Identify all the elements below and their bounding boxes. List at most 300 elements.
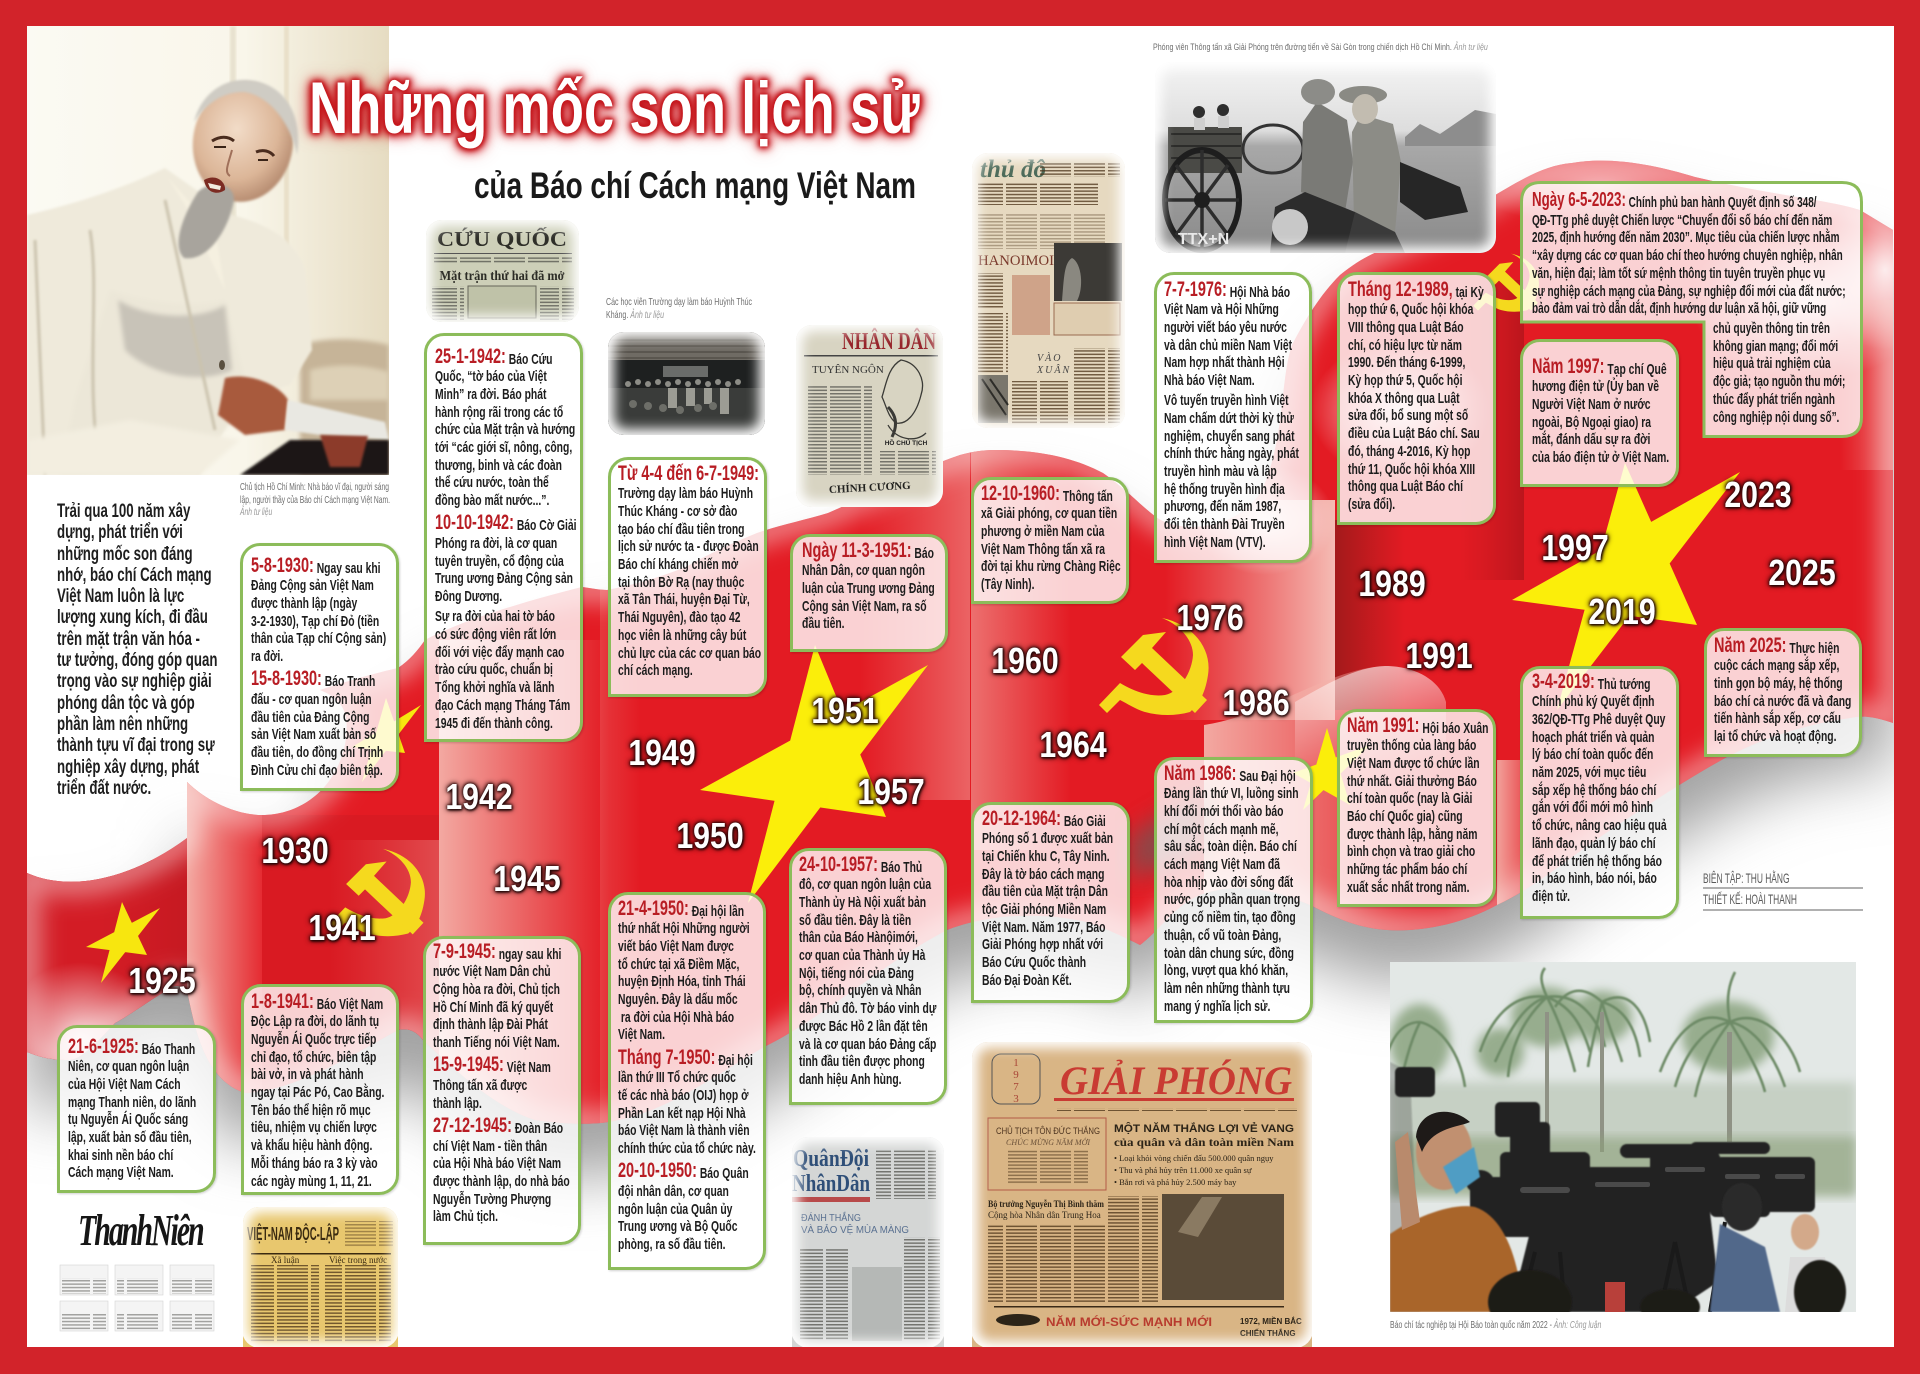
card: 1925: 21-6-1925: Báo Thanh bbox=[68, 1034, 195, 1058]
photo: Giai Phong newspaper: CHÚC MỪNG NĂM MỚI bbox=[1006, 1137, 1090, 1147]
title: Những mốc son lịch sử bbox=[309, 68, 920, 149]
card: 1976 bbox=[1154, 272, 1312, 563]
card: 1942: Quốc, “tờ báo của Việt bbox=[435, 368, 547, 385]
card: 1986: làm nên những thành tựu bbox=[1164, 980, 1290, 997]
card: 1949: Thúc Kháng - cơ sở đào bbox=[618, 503, 737, 520]
photo: Quan Doi Nhan Dan newspaper: NhânDân bbox=[792, 1171, 870, 1197]
card: 1949: học viên là những cây bút bbox=[618, 627, 746, 644]
star 1930 bbox=[352, 698, 421, 782]
card: 2023: không gian mạng; đổi mới bbox=[1713, 338, 1838, 355]
card: 2025: cuộc cách mạng sắp xếp, bbox=[1714, 657, 1839, 674]
card: 1945: nước Việt Nam Dân chủ bbox=[433, 963, 551, 980]
photo: Quan Doi Nhan Dan newspaper: ĐÁNH THẮNG bbox=[801, 1211, 861, 1224]
card: 1950: phòng, ra số đầu tiên. bbox=[618, 1236, 726, 1253]
card: 1957: đô, cơ quan ngôn luận của bbox=[799, 876, 931, 893]
card: 1964: Việt Nam. Năm 1977, Báo bbox=[982, 919, 1105, 936]
photo: war correspondents on motorbike: TTX+N bbox=[1178, 231, 1229, 248]
card: 1976: phương, đến năm 1987, bbox=[1164, 498, 1281, 515]
year 1957: 1957 bbox=[857, 771, 925, 812]
card: 2023: hiệu quả trải nghiệm của bbox=[1713, 355, 1831, 372]
card: 1950: thứ nhất Hội Những người bbox=[618, 920, 750, 937]
card: 1986: nước, góp phần quan trọng bbox=[1164, 891, 1300, 908]
card: 1976: 7-7-1976: Hội Nhà báo bbox=[1164, 278, 1290, 300]
big star 1951 bbox=[700, 645, 928, 903]
photo: Giai Phong newspaper: Bộ trưởng Nguyễn Thị Bình thăm bbox=[988, 1199, 1104, 1209]
card: 1942: Trung ương Đảng Cộng sản bbox=[435, 570, 573, 587]
card: 1986: cách mạng Việt Nam đã bbox=[1164, 856, 1280, 873]
card: 1925: Niên, cơ quan ngôn luận bbox=[68, 1058, 189, 1075]
year 2023: 2023 bbox=[1724, 474, 1792, 515]
photo: Giai Phong newspaper: CHIẾN THẮNG bbox=[1240, 1328, 1296, 1338]
card: 2023: “xây dựng các cơ quan báo chí theo hướng chuyên nghiệp, nhân bbox=[1532, 247, 1843, 264]
photo: Nhan Dan newspaper bbox=[796, 325, 943, 507]
card: 1950: 20-10-1950: Báo Quân bbox=[618, 1159, 749, 1182]
photo: Thu Do / Ha Noi Moi newspaper bbox=[972, 153, 1125, 428]
card: 1957 bbox=[789, 848, 947, 1105]
card: 1930 bbox=[240, 543, 399, 791]
card: 2025: lại tổ chức và hoạt động. bbox=[1714, 728, 1837, 745]
caption: school photo: Các học viên Trường dạy làm báo Huỳnh Thúc bbox=[606, 296, 752, 308]
photo: Cuu Quoc newspaper: CỨU QUỐC bbox=[437, 227, 567, 251]
year 1997: 1997 bbox=[1541, 527, 1609, 568]
card: 1976: Nam chấm dứt thời kỳ thử bbox=[1164, 410, 1294, 427]
card: 1997: mắt, đánh dấu sự ra đời bbox=[1532, 431, 1650, 448]
card: 1941: Tên báo thể hiện rõ mục bbox=[251, 1102, 371, 1119]
caption: portrait bbox=[240, 481, 390, 518]
card: 1942: Sự ra đời của hai tờ báo bbox=[435, 608, 555, 625]
card: 1941: Mỗi tháng báo ra 3 kỳ vào bbox=[251, 1155, 378, 1172]
intro text: trọng vào sự nghiệp giải bbox=[57, 670, 212, 692]
card: 1976: người viết báo yêu nước bbox=[1164, 319, 1287, 336]
card: 1989: (sửa đổi). bbox=[1348, 496, 1395, 513]
year 1986: 1986 bbox=[1222, 682, 1290, 723]
card: 1951: Nhân Dân, cơ quan ngôn bbox=[802, 562, 925, 579]
card: 1942: 1945 đi đến thành công. bbox=[435, 715, 553, 732]
card: 1957: 24-10-1957: Báo Thủ bbox=[799, 852, 922, 876]
photo: Giai Phong newspaper: Cộng hòa Nhân dân Trung Hoa bbox=[988, 1210, 1101, 1220]
card: 1976: chính thức hằng ngày, phát bbox=[1164, 445, 1299, 462]
card: 1950: Nguyên. Đây là dấu mốc bbox=[618, 991, 738, 1008]
caption: press corps: Báo chí tác nghiệp tại Hội Báo toàn quốc năm 2022 - Ảnh: Công luận bbox=[1390, 1320, 1601, 1331]
card: 1925: tụ Nguyễn Ái Quốc sáng bbox=[68, 1111, 188, 1128]
card: 1976: đổi tên thành Đài Truyền bbox=[1164, 516, 1285, 533]
star 1925 bbox=[86, 902, 160, 983]
card: 1941: Độc Lập ra đời, do lãnh tụ bbox=[251, 1013, 379, 1030]
caption: portrait: lập, người thầy của Báo chí Cách mạng Việt Nam. bbox=[240, 494, 390, 506]
intro text bbox=[57, 500, 217, 799]
card: 1976: hình Việt Nam (VTV). bbox=[1164, 534, 1266, 551]
card: 1986: hòa nhịp vào đời sống đất bbox=[1164, 874, 1293, 891]
card: 1925: mạng Thanh niên, do lãnh bbox=[68, 1094, 196, 1111]
card: 1942: thể cứu nước, toàn thể bbox=[435, 474, 549, 491]
card: 1950: Phần Lan kết nạp Hội Nhà bbox=[618, 1105, 746, 1122]
card: 1941: chỉ đạo, tổ chức, biên tập bbox=[251, 1049, 376, 1066]
card: 1942: tuyên truyền, cổ động của bbox=[435, 553, 564, 570]
card: 1991: xuất sắc nhất trong năm. bbox=[1347, 879, 1470, 896]
photo: Giai Phong newspaper: • Loại khỏi vòng chiến đấu 500.000 quân ngụy bbox=[1114, 1153, 1274, 1163]
year 1949: 1949 bbox=[628, 732, 696, 773]
card: 1945: 15-9-1945: Việt Nam bbox=[433, 1053, 551, 1076]
card: 1964: tộc Giải phóng Miền Nam bbox=[982, 901, 1106, 918]
card: 1964: Báo Cứu Quốc thành bbox=[982, 954, 1086, 971]
card: 1986: toàn dân chung sức, đồng bbox=[1164, 945, 1294, 962]
card: 1930: 5-8-1930: Ngay sau khi bbox=[251, 554, 381, 576]
intro text: Trải qua 100 năm xây bbox=[57, 500, 190, 522]
card: 1945: định thành lập Đài Phát bbox=[433, 1016, 548, 1033]
card: 1930: Đảng Cộng sản Việt Nam bbox=[251, 577, 374, 594]
card: 1989: 1990. Đến tháng 6-1999, bbox=[1348, 354, 1465, 371]
photo: Thu Do / Ha Noi Moi newspaper: HANOIMOI bbox=[978, 253, 1054, 269]
photo: Cuu Quoc newspaper: Mặt trận thứ hai đã mở bbox=[440, 269, 565, 284]
card: 1942: thương, binh và các đoàn bbox=[435, 457, 562, 474]
caption: school photo bbox=[606, 296, 752, 320]
card: 1930: đấu - cơ quan ngôn luận bbox=[251, 691, 372, 708]
card: 1942: 25-1-1942: Báo Cứu bbox=[435, 344, 552, 368]
card: 1950: lần thứ III Tổ chức quốc bbox=[618, 1069, 736, 1086]
card: 1986 bbox=[1154, 757, 1313, 1023]
logo: Thanh Nien handwriting: ThanhNiên bbox=[78, 1206, 203, 1255]
intro text: lượng xung kích, đi đầu bbox=[57, 606, 208, 628]
card: 1941: và khẩu hiệu hành động. bbox=[251, 1137, 372, 1154]
card: 1951: đầu tiên. bbox=[802, 615, 845, 632]
year 1960: 1960 bbox=[991, 640, 1059, 681]
photo: Giai Phong newspaper: 1 bbox=[1013, 1057, 1019, 1069]
photo: Giai Phong newspaper: MỘT NĂM THẮNG LỢI VẺ VANG bbox=[1114, 1122, 1294, 1135]
photo: Viet Nam Doc Lap newspaper: Việc trong nước bbox=[329, 1255, 387, 1265]
card: 1950: viết báo Việt Nam được bbox=[618, 938, 734, 955]
photo: Nhan Dan newspaper: HỒ CHỦ TỊCH bbox=[885, 437, 928, 447]
card: 1950: ngôn luận của Quân ủy bbox=[618, 1201, 732, 1218]
card: 1989: sửa đổi, bổ sung một số bbox=[1348, 407, 1468, 424]
card: 1949: xã Tân Thái, huyện Đại Từ, bbox=[618, 591, 750, 608]
year 1991: 1991 bbox=[1405, 635, 1473, 676]
card: 1930: đầu tiên, do đồng chí Trịnh bbox=[251, 744, 383, 761]
card: 1989: thứ 11, Quốc hội khóa XIII bbox=[1348, 461, 1475, 478]
card: 1951: luận của Trung ương Đảng bbox=[802, 580, 935, 597]
card: 1957: số đầu tiên. Đây là tiền bbox=[799, 912, 911, 929]
photo: Thu Do / Ha Noi Moi newspaper: thủ đô bbox=[980, 156, 1046, 183]
card: 1964: Đây là tờ báo cách mạng bbox=[982, 866, 1104, 883]
card: 1976: truyền hình màu và lập bbox=[1164, 463, 1277, 480]
card: 2025: tiến hành sắp xếp, cơ cấu bbox=[1714, 710, 1841, 727]
card: 1949: lịch sử nước ta - được Đoàn bbox=[618, 538, 759, 555]
card: 1942: có sức động viên rất lớn bbox=[435, 626, 556, 643]
card: 1949: Thái Nguyên), đào tạo 42 bbox=[618, 609, 740, 626]
card: 1925: Cách mạng Việt Nam. bbox=[68, 1164, 174, 1181]
card: 2019: 3-4-2019: Thủ tướng bbox=[1532, 670, 1650, 692]
card: 1960: phương ở miền Nam của bbox=[981, 523, 1104, 540]
caption: correspondents: Phóng viên Thông tấn xã Giải Phóng trên đường tiến về Sài Gòn trong chiến dịch Hồ Chí Minh. Ảnh tư liệu bbox=[1153, 42, 1488, 53]
card: 1976: Nam hợp nhất thành Hội bbox=[1164, 354, 1285, 371]
card: 1960: 12-10-1960: Thông tấn bbox=[981, 482, 1113, 504]
photo: Viet Nam Doc Lap newspaper bbox=[243, 1207, 398, 1347]
photo: Quan Doi Nhan Dan newspaper bbox=[792, 1137, 944, 1347]
card: 1986: mang ý nghĩa lịch sử. bbox=[1164, 998, 1270, 1015]
card: 2019: tổ chức, nâng cao hiệu quả bbox=[1532, 817, 1667, 834]
card: 1925: lập, xuất bản số đầu tiên, bbox=[68, 1129, 192, 1146]
card: 1991: những tác phẩm báo chí bbox=[1347, 861, 1467, 878]
credits: BIÊN TẬP: THU HẰNG bbox=[1703, 870, 1790, 886]
card: 1950: tế các nhà báo (OIJ) họp ở bbox=[618, 1087, 748, 1104]
card: 1945 bbox=[423, 936, 581, 1245]
card: 1945: Cộng hòa ra đời, Chủ tịch bbox=[433, 981, 560, 998]
card: 1950: đội nhân dân, cơ quan bbox=[618, 1183, 729, 1200]
card: 1960: xã Giải phóng, cơ quan tiền bbox=[981, 505, 1117, 522]
card: 1951: Cộng sản Việt Nam, ra số bbox=[802, 598, 927, 615]
card: 1976: và dân chủ miền Nam Việt bbox=[1164, 337, 1292, 354]
card: 2019: gắn với đổi mới mô hình bbox=[1532, 799, 1653, 816]
card: 1950: ra đời của Hội Nhà báo bbox=[621, 1009, 734, 1026]
card: 1991: chí toàn quốc (nay là Giải bbox=[1347, 790, 1472, 807]
caption: portrait: Ảnh tư liệu bbox=[240, 506, 272, 518]
card: 1945: Nguyễn Tường Phượng bbox=[433, 1191, 551, 1208]
card: 1964: Phóng số 1 được xuất bản bbox=[982, 830, 1113, 847]
card: 1960: đời tại khu rừng Chàng Riệc bbox=[981, 558, 1121, 575]
card: 1957: thân của Báo Hànộimới, bbox=[799, 929, 918, 946]
card: 2019: để phát triển hệ thống báo bbox=[1532, 853, 1662, 870]
photo: Giai Phong newspaper: 9 bbox=[1013, 1069, 1019, 1081]
photo: Giai Phong newspaper: GIẢI PHÓNG bbox=[1060, 1058, 1292, 1103]
card: 1930: Đình Cửu chỉ đạo biên tập. bbox=[251, 762, 383, 779]
card: 1945: 7-9-1945: ngay sau khi bbox=[433, 940, 561, 962]
year 1945: 1945 bbox=[493, 858, 561, 899]
card: 1991: Năm 1991: Hội báo Xuân bbox=[1347, 714, 1489, 736]
card: 1945: của Hội Nhà báo Việt Nam bbox=[433, 1155, 561, 1172]
intro text: những mốc son đáng bbox=[57, 543, 193, 565]
card: 2019: lý báo chí toàn quốc đến bbox=[1532, 746, 1653, 763]
card: 1960: (Tây Ninh). bbox=[981, 576, 1034, 593]
card: 1950: chính thức của tổ chức này. bbox=[618, 1140, 756, 1157]
card: 2023: 2025, định hướng đến năm 2030”. Mục tiêu của chiến lược nhằm bbox=[1532, 229, 1839, 246]
card: 1976: nghiệm, chuyển sang phát bbox=[1164, 428, 1295, 445]
card: 1991: thứ nhất. Giải thưởng Báo bbox=[1347, 773, 1477, 790]
card: 1957: Thành ủy Hà Nội xuất bản bbox=[799, 894, 926, 911]
card: 1941: Nguyễn Ái Quốc trực tiếp bbox=[251, 1031, 376, 1048]
card: 1976: Việt Nam và Hội Những bbox=[1164, 301, 1279, 318]
photo: Giai Phong newspaper: • Bắn rơi và phá hủy 2.500 máy bay bbox=[1114, 1177, 1237, 1187]
intro text: trên mặt trận văn hóa - bbox=[57, 628, 200, 650]
card: 1941: các ngày mùng 1, 11, 21. bbox=[251, 1173, 372, 1190]
card: 1989: khóa X thông qua Luật bbox=[1348, 390, 1460, 407]
card: 1930: sản Việt Nam xuất bản số bbox=[251, 726, 376, 743]
card: 2025: tinh gọn bộ máy, hệ thống bbox=[1714, 675, 1843, 692]
card: 1976: Nhà báo Việt Nam. bbox=[1164, 372, 1255, 389]
card: 1991 bbox=[1337, 709, 1496, 907]
card: 1949 bbox=[608, 457, 767, 697]
card: 2019: hoạch phát triển và quản bbox=[1532, 729, 1654, 746]
card: 1964: 20-12-1964: Báo Giải bbox=[982, 806, 1106, 830]
card: 1957: dân Thủ đô. Tờ báo vinh dự bbox=[799, 1000, 936, 1017]
photo: Giai Phong newspaper: NĂM MỚI-SỨC MẠNH MỚI bbox=[1046, 1314, 1212, 1329]
card: 1949: Từ 4-4 đến 6-7-1949: bbox=[618, 462, 759, 484]
card: 1950: 21-4-1950: Đại hội lần bbox=[618, 896, 744, 920]
intro text: phần làm nên những bbox=[57, 713, 188, 735]
card: 1925: khai sinh nền báo chí bbox=[68, 1147, 173, 1164]
card: 1989 bbox=[1337, 272, 1496, 525]
year 1951: 1951 bbox=[811, 690, 879, 731]
card: 1950: Tháng 7-1950: Đại hội bbox=[618, 1046, 753, 1069]
big star 2019 bbox=[1512, 463, 1740, 710]
intro text: phóng dân tộc và góp bbox=[57, 692, 195, 714]
photo: war correspondents on motorbike bbox=[1155, 62, 1496, 253]
card: 1964: đầu tiên của Mặt trận Dân bbox=[982, 883, 1108, 900]
card: 1957: danh hiệu Anh hùng. bbox=[799, 1071, 902, 1088]
card: 1925 bbox=[57, 1025, 216, 1193]
year 1950: 1950 bbox=[676, 815, 744, 856]
card: 1989: điều của Luật Báo chí. Sau bbox=[1348, 425, 1480, 442]
intro text: dựng, phát triển với bbox=[57, 521, 183, 543]
card: 1989: đó, tháng 4-2016, Kỳ họp bbox=[1348, 443, 1470, 460]
hammer and sickle 1941 bbox=[326, 849, 425, 936]
intro text: thành tựu vĩ đại trong sự bbox=[57, 734, 215, 756]
card: 1942: trào cứu quốc, chuẩn bị bbox=[435, 661, 553, 678]
card: 1951: Ngày 11-3-1951: Báo bbox=[802, 538, 934, 562]
card: 1942: Tổng khởi nghĩa và lãnh bbox=[435, 679, 554, 696]
card: 1942: chức của Mặt trận và hướng bbox=[435, 421, 575, 438]
card: 1997: hương điện tử (Ủy ban về bbox=[1532, 378, 1659, 395]
photo: Giai Phong newspaper: 3 bbox=[1013, 1093, 1019, 1105]
card: 2019: sắp xếp hệ thống báo chí bbox=[1532, 782, 1656, 799]
card: 1986: củng cố niềm tin, tạo đồng bbox=[1164, 909, 1296, 926]
card: 2023: QĐ-TTg phê duyệt Chiến lược “Chuyển đổi số báo chí đến năm bbox=[1532, 212, 1832, 229]
card: 1989: họp thứ 6, Quốc hội khóa bbox=[1348, 301, 1473, 318]
photo: Giai Phong newspaper: của quân và dân toàn miền Nam bbox=[1114, 1135, 1294, 1149]
photo: Giai Phong newspaper: CHỦ TỊCH TÔN ĐỨC THẮNG bbox=[996, 1125, 1100, 1136]
photo: Giai Phong newspaper: • Thu và phá hủy trên 11.000 xe quân sự bbox=[1114, 1165, 1252, 1175]
card: 1951 bbox=[790, 534, 948, 652]
card: 1997: Năm 1997: Tạp chí Quê bbox=[1532, 354, 1667, 378]
card: 1986: thuận, cổ vũ toàn Đảng, bbox=[1164, 927, 1281, 944]
card: 1989: thông qua Luật Báo chí bbox=[1348, 478, 1463, 495]
card: 1957: Nội, tiếng nói của Đảng bbox=[799, 965, 914, 982]
year 1925: 1925 bbox=[128, 960, 196, 1001]
card: 2023: thúc đẩy phát triển ngành bbox=[1713, 391, 1835, 408]
hammer and sickle 2023 bbox=[1473, 254, 1539, 312]
card: 1949: Báo chí kháng chiến mở bbox=[618, 556, 738, 573]
card: 1986: chí một cách mạnh mẽ, bbox=[1164, 821, 1278, 838]
card: 1957: và là cơ quan báo Đảng cấp bbox=[799, 1036, 936, 1053]
card: 1942: đạo Cách mạng Tháng Tám bbox=[435, 697, 570, 714]
card: 1941: bài vở, in và phát hành bbox=[251, 1066, 364, 1083]
card: 2019: Chính phủ ký Quyết định bbox=[1532, 693, 1654, 710]
card: 1949: chí cách mạng. bbox=[618, 662, 693, 679]
photo: Giai Phong newspaper: 1972, MIỀN BẮC bbox=[1240, 1316, 1302, 1326]
card: 1949: chủ lực của các cơ quan báo bbox=[618, 645, 761, 662]
card: 1986: khí đổi mới thổi vào báo bbox=[1164, 803, 1283, 820]
card: 2023 bbox=[1520, 181, 1863, 438]
card: 1957: tỉnh đầu tiên được phong bbox=[799, 1053, 925, 1070]
card: 1949: Trường dạy làm báo Huỳnh bbox=[618, 485, 753, 502]
photo: journalism school group bbox=[608, 332, 765, 435]
photo: Quan Doi Nhan Dan newspaper: VÀ BẢO VỆ MÙA MÀNG bbox=[801, 1223, 909, 1236]
year 1942: 1942 bbox=[445, 776, 513, 817]
card: 1997: của báo điện tử ở Việt Nam. bbox=[1532, 449, 1669, 466]
card: 2025: Năm 2025: Thực hiện bbox=[1714, 634, 1839, 656]
card: 1945: Thông tấn xã được bbox=[433, 1077, 527, 1094]
card: 1976: hệ thống truyền hình địa bbox=[1164, 481, 1285, 498]
card: 2023: sự nghiệp cách mạng của Đảng, sự nghiệp đổi mới của đất nước; bbox=[1532, 283, 1846, 300]
year 1976: 1976 bbox=[1176, 597, 1244, 638]
card: 1989: Tháng 12-1989, tại Kỳ bbox=[1348, 278, 1484, 300]
card: 2023: chủ quyền thông tin trên bbox=[1713, 320, 1830, 337]
card: 1942: hành rộng rãi trong các tổ bbox=[435, 404, 563, 421]
card: 1991: truyền thống của làng báo bbox=[1347, 737, 1476, 754]
card: 2019: lãnh đạo, quản lý báo chí bbox=[1532, 835, 1656, 852]
card: 1930: 15-8-1930: Báo Tranh bbox=[251, 667, 375, 690]
card: 2025 bbox=[1704, 628, 1862, 757]
photo: Giai Phong newspaper bbox=[972, 1042, 1312, 1347]
card: 1991: được thành lập, hằng năm bbox=[1347, 826, 1477, 843]
card: 1986: sâu sắc, toàn diện. Báo chí bbox=[1164, 838, 1297, 855]
intro text: nghiệp xây dựng, phát bbox=[57, 756, 199, 778]
card: 1964: tại Chiến khu C, Tây Ninh. bbox=[982, 848, 1110, 865]
card: 1945: thành lập. bbox=[433, 1095, 482, 1112]
card: 1950: huyện Định Hóa, tỉnh Thái bbox=[618, 973, 746, 990]
card: 2023: văn, hiện đại; làm tốt sứ mệnh thông tin tuyên truyền phục vụ bbox=[1532, 265, 1825, 282]
card: 2019: điện tử. bbox=[1532, 888, 1570, 905]
red waving flag bbox=[2, 145, 1920, 1140]
card: 1941: 1-8-1941: Báo Việt Nam bbox=[251, 990, 383, 1012]
photo: Thu Do / Ha Noi Moi newspaper: VÀO bbox=[1037, 352, 1062, 364]
flag shadow bbox=[27, 213, 1893, 1176]
card: 2019: năm 2025, với mục tiêu bbox=[1532, 764, 1646, 781]
card: 1991: Báo chí Quốc gia) cũng bbox=[1347, 808, 1463, 825]
card: 2025: báo chí cả nước đã và đang bbox=[1714, 693, 1851, 710]
card: 2023: bảo đảm vai trò dẫn dắt, định hướng dư luận xã hội, giữ vững bbox=[1532, 300, 1826, 317]
hammer and sickle 1976 bbox=[1099, 618, 1209, 715]
card: 1976: Vô tuyến truyền hình Việt bbox=[1164, 392, 1289, 409]
year 1930: 1930 bbox=[261, 830, 329, 871]
photo: Quan Doi Nhan Dan newspaper: QuânĐội bbox=[793, 1146, 869, 1172]
card: 1930: thân của Tạp chí Cộng sản) bbox=[251, 630, 386, 647]
card: 1945: thanh Tiếng nói Việt Nam. bbox=[433, 1034, 560, 1051]
intro text: nhớ, báo chí Cách mạng bbox=[57, 564, 212, 586]
card: 1950: Trung ương và Bộ Quốc bbox=[618, 1218, 738, 1235]
subtitle: của Báo chí Cách mạng Việt Nam bbox=[474, 165, 916, 206]
card: 2019: in, báo hình, báo nói, báo bbox=[1532, 870, 1657, 887]
photo: Thanh Nien issues bbox=[60, 1264, 214, 1332]
intro text: tư tưởng, đóng góp quan bbox=[57, 649, 217, 671]
card: 1964: Báo Đại Đoàn Kết. bbox=[982, 972, 1072, 989]
card: 1997: Người Việt Nam ở nước bbox=[1532, 396, 1651, 413]
card: 1930: đầu tiên của Đảng Cộng bbox=[251, 709, 369, 726]
card: 1960: Việt Nam Thông tấn xã ra bbox=[981, 541, 1105, 558]
card: 1957: bộ, chính quyền và Nhân bbox=[799, 982, 921, 999]
card: 2023: độc giả; tạo nguồn thu mới; bbox=[1713, 373, 1845, 390]
card: 1945: Hồ Chí Minh đã ký quyết bbox=[433, 999, 553, 1016]
photo: press corps with cameras bbox=[1390, 962, 1856, 1312]
card: 1945: chí Việt Nam - tiền thân bbox=[433, 1138, 547, 1155]
card: 2023: Ngày 6-5-2023: Chính phủ ban hành Quyết định số 348/ bbox=[1532, 189, 1817, 211]
card: 1945: làm Chủ tịch. bbox=[433, 1208, 498, 1225]
card: 1930: ra đời. bbox=[251, 648, 283, 665]
photo: Ho Chi Minh portrait bbox=[27, 26, 389, 475]
card: 1949: tại thôn Bờ Rạ (nay thuộc bbox=[618, 574, 744, 591]
card: 1942: Đông Dương. bbox=[435, 588, 502, 605]
card: 2019 bbox=[1520, 666, 1679, 919]
photo: Thu Do / Ha Noi Moi newspaper: XUÂN bbox=[1036, 364, 1071, 376]
card: 1950: tổ chức tại xã Điềm Mặc, bbox=[618, 956, 739, 973]
card: 1960 bbox=[971, 477, 1129, 604]
year 1941: 1941 bbox=[308, 907, 376, 948]
card: 1925: của Hội Việt Nam Cách bbox=[68, 1076, 181, 1093]
card: 1950: báo Việt Nam là thành viên bbox=[618, 1122, 750, 1139]
credits: THIẾT KẾ: HOÀI THANH bbox=[1703, 891, 1797, 907]
card: 1997: ngoài, Bộ Ngoại giao) ra bbox=[1532, 414, 1651, 431]
card: 1986: lòng, vượt qua khó khăn, bbox=[1164, 962, 1288, 979]
card: 1989: VIII thông qua Luật Báo bbox=[1348, 319, 1464, 336]
caption: portrait: Chủ tịch Hồ Chí Minh: Nhà báo vĩ đại, người sáng bbox=[240, 481, 389, 493]
